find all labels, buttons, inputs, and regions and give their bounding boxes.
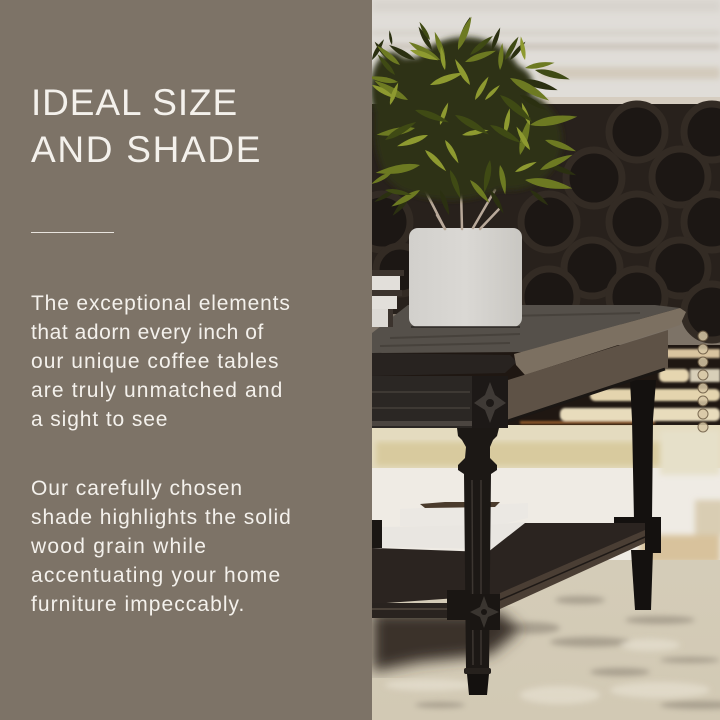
text block: shade paragraph bbox=[31, 477, 292, 616]
beaded chain bbox=[698, 331, 708, 432]
text block: elements paragraph: that adorn every inch of bbox=[31, 321, 264, 344]
text block: shade paragraph: shade highlights the solid bbox=[31, 506, 292, 529]
photo: coffee table with plant bbox=[372, 0, 720, 720]
text block: elements paragraph: a sight to see bbox=[31, 408, 168, 431]
plant foliage bbox=[368, 15, 578, 217]
divider rule bbox=[31, 232, 114, 233]
text block: elements paragraph: are truly unmatched and bbox=[31, 379, 283, 402]
table: lower shelf bbox=[372, 502, 645, 618]
table: beaded edge bbox=[508, 369, 665, 421]
text block: elements paragraph: our unique coffee tables bbox=[31, 350, 280, 373]
plant stems bbox=[425, 190, 500, 229]
text block: shade paragraph: Our carefully chosen bbox=[31, 477, 243, 500]
heading: IDEAL SIZE bbox=[31, 82, 238, 123]
table: side apron bbox=[508, 330, 668, 420]
books on shelf bbox=[381, 502, 528, 549]
gold stripes bbox=[520, 349, 720, 424]
background: dark patterned wallpaper bbox=[354, 104, 720, 340]
table: front leg bbox=[457, 428, 499, 695]
text block: elements paragraph bbox=[31, 292, 291, 431]
text block: shade paragraph: wood grain while bbox=[31, 535, 207, 558]
table: carved block with flower bbox=[472, 376, 508, 428]
table: top surface bbox=[372, 305, 686, 376]
table: back leg bbox=[614, 380, 661, 610]
text block: shade paragraph: furniture impeccably. bbox=[31, 593, 245, 616]
rug bbox=[372, 560, 720, 720]
background: blurred room and floor bbox=[372, 331, 720, 563]
background: ceiling moulding bbox=[372, 0, 720, 104]
table: lower carved block bbox=[447, 590, 500, 630]
heading bbox=[31, 82, 262, 170]
books on table bbox=[372, 270, 404, 327]
text block: shade paragraph: accentuating your home bbox=[31, 564, 281, 587]
text block: elements paragraph: The exceptional elements bbox=[31, 292, 291, 315]
heading: AND SHADE bbox=[31, 129, 262, 170]
table: front apron bbox=[372, 376, 472, 428]
panel: text column bbox=[0, 0, 372, 720]
plant pot bbox=[409, 228, 522, 327]
